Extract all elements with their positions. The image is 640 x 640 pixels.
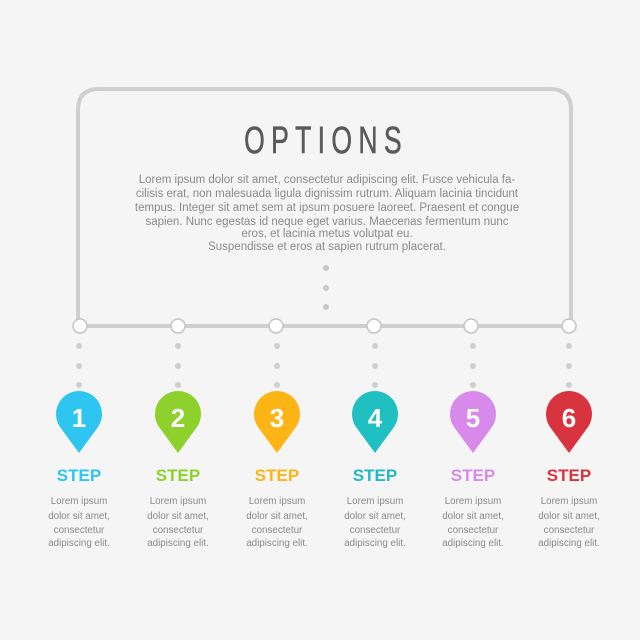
step 6: Lorem ipsum (541, 496, 597, 507)
step 6: 6 (562, 403, 576, 433)
step 3 (246, 343, 308, 549)
step 5: Lorem ipsum (445, 496, 501, 507)
step 6 (538, 343, 600, 549)
step 3: Lorem ipsum (249, 496, 305, 507)
step 1: dolor sit amet, (48, 511, 110, 522)
step 4: consectetur (350, 525, 401, 536)
step 4: dolor sit amet, (344, 511, 406, 522)
step 3: consectetur (252, 525, 303, 536)
timeline nodes (73, 319, 576, 333)
step 4: Lorem ipsum (347, 496, 403, 507)
text block: description (135, 174, 519, 253)
step 1 (48, 343, 110, 549)
step 5: adipiscing elit. (442, 538, 504, 549)
step 6: STEP (547, 466, 591, 485)
step 4: STEP (353, 466, 397, 485)
step 6: consectetur (544, 525, 595, 536)
step 4: 4 (368, 403, 383, 433)
title: OPTIONS (244, 118, 408, 161)
step 1: adipiscing elit. (48, 538, 110, 549)
step 3: dolor sit amet, (246, 511, 308, 522)
step 4: adipiscing elit. (344, 538, 406, 549)
step 3: STEP (255, 466, 299, 485)
text block: description: tempus. Integer sit amet sem at ipsum posuere laoreet. Praesent et congue (135, 202, 519, 214)
step 1: Lorem ipsum (51, 496, 107, 507)
step 5: STEP (451, 466, 495, 485)
text block: description: Suspendisse et eros at sapien rutrum placerat. (208, 241, 446, 253)
text block: description: Lorem ipsum dolor sit amet, consectetur adipiscing elit. Fusce vehicula fa- (139, 174, 515, 186)
step 2: 2 (171, 403, 185, 433)
step 3: 3 (270, 403, 284, 433)
step 5: consectetur (448, 525, 499, 536)
step 6: dolor sit amet, (538, 511, 600, 522)
step 2: dolor sit amet, (147, 511, 209, 522)
connector dots center (323, 265, 329, 310)
text block: description: sapien. Nunc egestas id neque eget varius. Maecenas fermentum nunc (145, 216, 509, 228)
step 5 (442, 343, 504, 549)
text block: description: cilisis erat, non malesuada ligula dignissim rutrum. Aliquam lacinia tincidunt (136, 188, 519, 200)
step 3: adipiscing elit. (246, 538, 308, 549)
frame: options box (78, 89, 571, 326)
step 1: STEP (57, 466, 101, 485)
step 5: dolor sit amet, (442, 511, 504, 522)
step 6: adipiscing elit. (538, 538, 600, 549)
step 2: adipiscing elit. (147, 538, 209, 549)
step 1: consectetur (54, 525, 105, 536)
step 2: consectetur (153, 525, 204, 536)
step 4 (344, 343, 406, 549)
step 1: 1 (72, 403, 86, 433)
step 2: STEP (156, 466, 200, 485)
text block: description: eros, et lacinia metus volutpat eu. (241, 228, 413, 240)
step 2: Lorem ipsum (150, 496, 206, 507)
step 5: 5 (466, 403, 480, 433)
step 2 (147, 343, 209, 549)
